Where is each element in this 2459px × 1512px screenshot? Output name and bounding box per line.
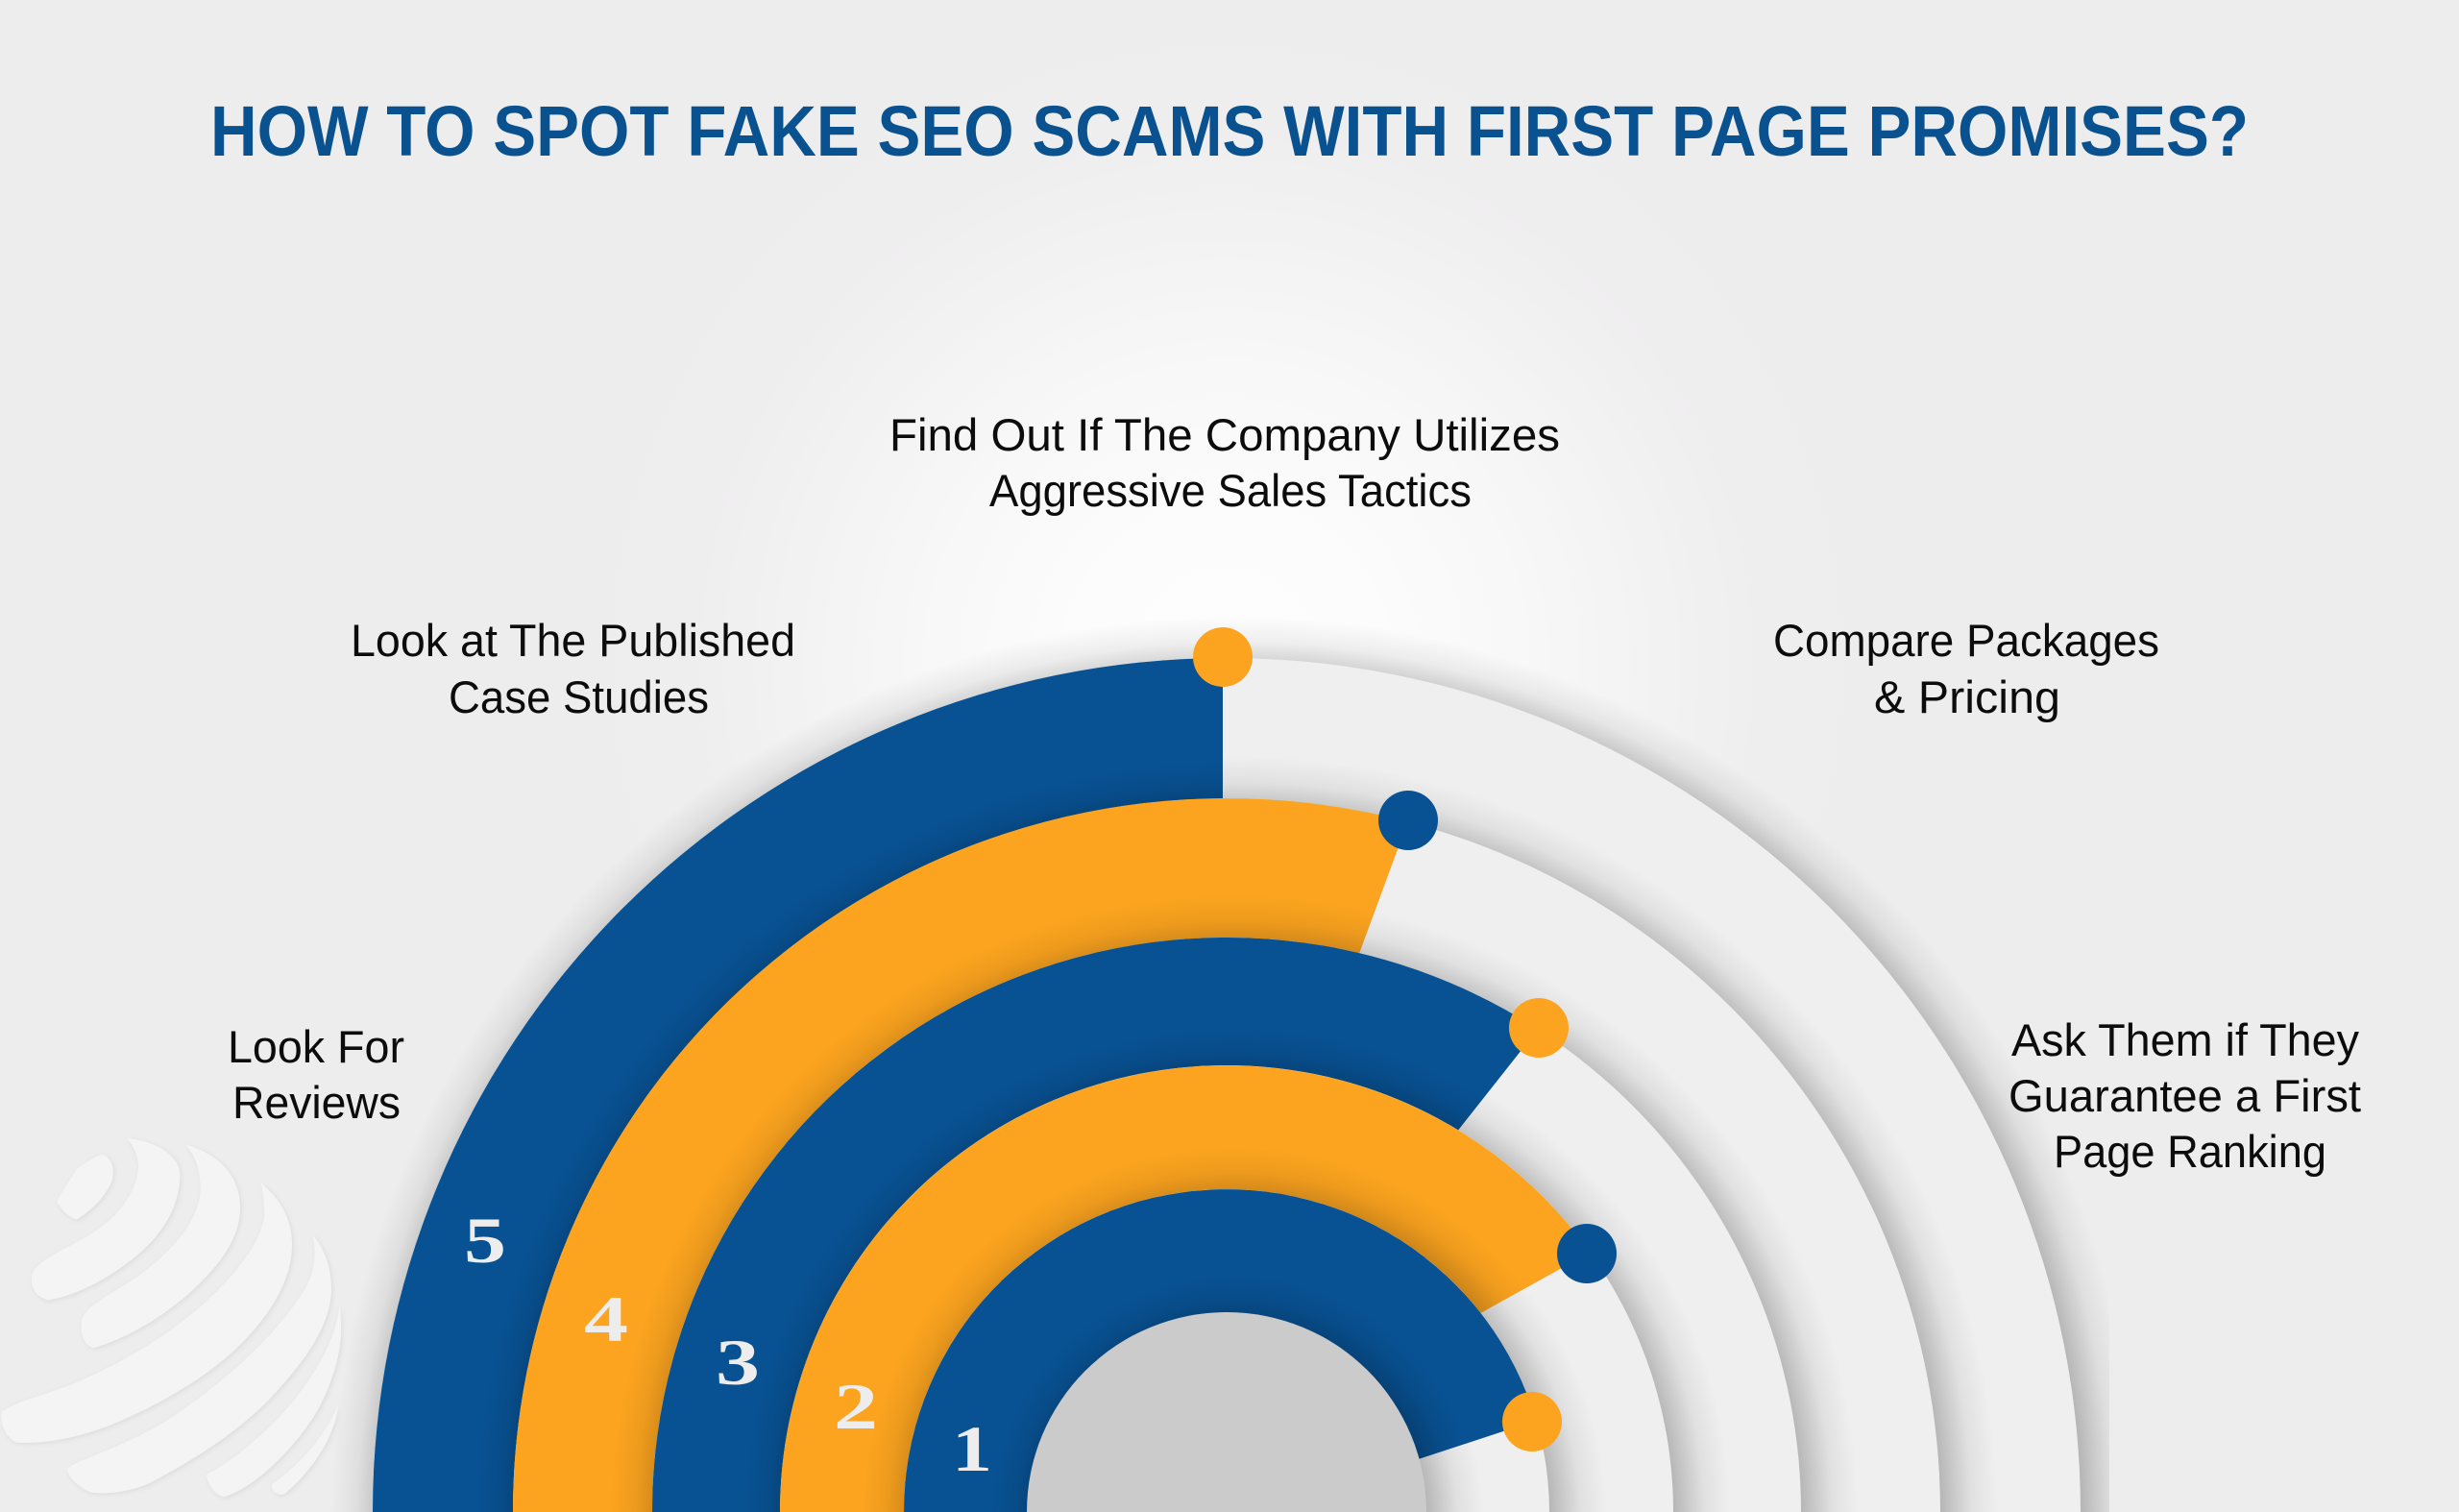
label: compare packages: & Pricing (1874, 671, 2060, 722)
label: look for reviews (228, 1021, 404, 1128)
label: guarantee first page ranking: Page Ranking (2054, 1126, 2326, 1177)
label: aggressive sales tactics (889, 409, 1560, 516)
label: published case studies: Look at The Published (351, 615, 795, 666)
ring 5 (330, 616, 2109, 1512)
ring 3 (610, 895, 1859, 1512)
ring numbers: 5 (464, 1204, 506, 1277)
ring numbers: 2 (834, 1370, 878, 1443)
label: look for reviews: Reviews (232, 1077, 401, 1128)
label: guarantee first page ranking (2009, 1014, 2361, 1177)
ring numbers: 1 (952, 1412, 992, 1485)
ring numbers: 3 (716, 1326, 760, 1399)
globe watermark (1, 1138, 341, 1497)
label: compare packages: Compare Packages (1773, 615, 2159, 666)
label: published case studies: Case Studies (449, 671, 709, 722)
ring 4 (471, 756, 1998, 1512)
ring numbers (464, 1204, 992, 1485)
label: compare packages (1773, 615, 2159, 722)
label: look for reviews: Look For (228, 1021, 404, 1072)
label: published case studies (351, 615, 795, 722)
label: guarantee first page ranking: Ask Them if They (2011, 1014, 2359, 1065)
ring end dots (1193, 627, 1617, 1451)
ring numbers: 4 (584, 1282, 628, 1355)
ring 2 (738, 1023, 1731, 1512)
label: aggressive sales tactics: Find Out If The Company Utilizes (889, 409, 1560, 460)
title: HOW TO SPOT FAKE SEO SCAMS WITH FIRST PAGE PROMISES? (210, 91, 2249, 171)
ring 1 (862, 1147, 1607, 1512)
centre grey semicircle (985, 1270, 1484, 1512)
label: aggressive sales tactics: Aggressive Sales Tactics (989, 465, 1472, 516)
label: guarantee first page ranking: Guarantee a First (2009, 1070, 2361, 1121)
